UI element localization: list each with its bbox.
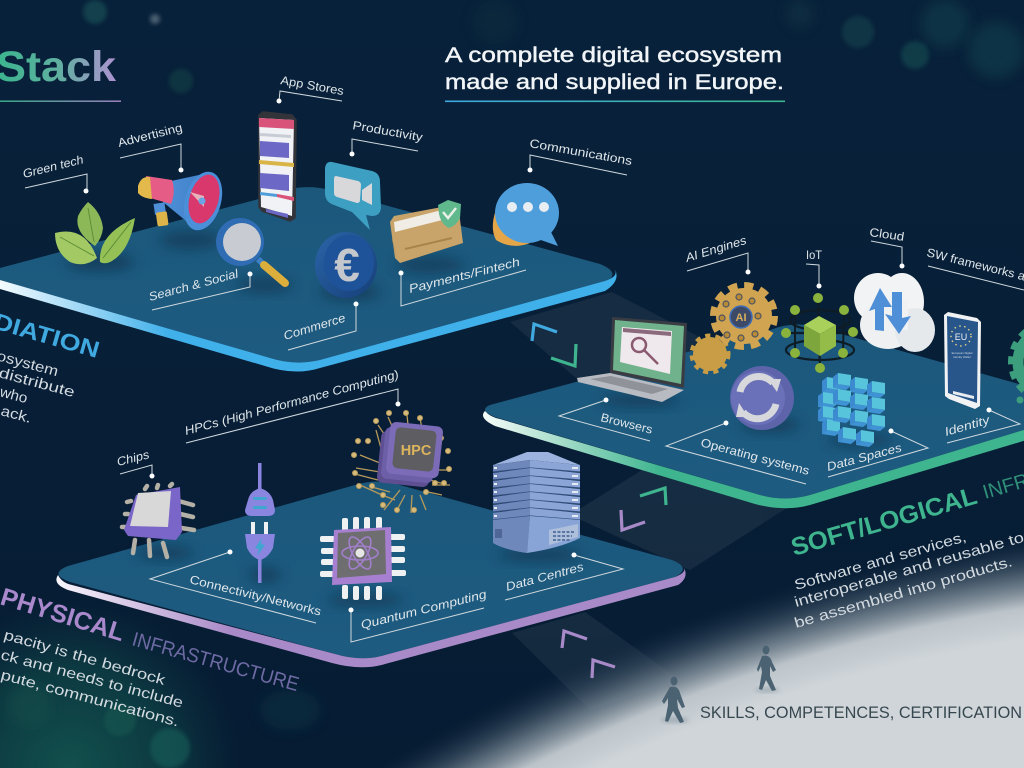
icon: advertising megaphone [138,167,229,235]
text block: soft/logical description [793,529,1024,632]
callout: chips [115,447,154,478]
callout: data spaces [825,428,928,477]
icon: commerce euro coin: € [334,239,360,291]
callout: communications [528,136,633,175]
connector bands between layers [510,292,790,710]
panel: mediation platform [0,187,617,372]
icon: productivity video bubble [325,162,381,230]
icon: SW frameworks gear [1011,323,1024,404]
headline [445,44,785,102]
icon: HPC stacked chip: HPC [401,443,432,459]
callout: communications: Communications [528,136,633,168]
text block: mediation description [0,348,76,427]
panel: soft/logical platform [483,324,1024,508]
callout: identity [943,408,1020,443]
icon: operating system sync [730,366,794,430]
callout: advertising: Advertising [116,120,184,150]
icon: browsers laptop [577,317,687,402]
icon: chips processor [122,484,194,557]
icon: identity EU wallet phone [944,312,981,409]
callout: cloud [869,225,905,268]
callout: data spaces: Data Spaces [825,440,903,474]
heading: soft/logical infrastructure [788,466,1024,562]
callout: operating systems [666,420,811,484]
callout: search and social: Search & Social [147,266,240,304]
icon: AI engines gears: AI [736,312,746,324]
callout: cloud: Cloud [869,225,905,244]
headline: made and supplied in Europe. [445,71,784,94]
callout: advertising [116,120,184,172]
text block: soft/logical description: interoperable and reusable to [793,530,1024,611]
callout: commerce: Commerce [282,311,347,343]
callout: commerce [282,302,358,350]
callout: quantum computing: Quantum Computing [359,587,488,632]
callout: green tech: Green tech [21,152,85,181]
text block: soft/logical description: Software and services, [793,529,968,594]
callout: connectivity: Connectivity/Networks [188,572,323,619]
callout: IoT [806,248,823,288]
icon: walking person back [755,646,779,692]
icon: HPC stacked chip [352,410,452,513]
callout: search and social [147,266,252,310]
callout: data centres: Data Centres [504,560,585,594]
callout: HPCs: HPCs (High Performance Computing) [183,367,400,438]
heading: soft/logical infrastructure: SOFT/LOGICAL [788,482,980,562]
heading: physical infrastructure: INFRASTRUCTURE [130,629,301,696]
icon: identity EU wallet phone: EU [955,332,967,342]
panel: physical platform [56,482,686,667]
icon: app stores phone [259,112,296,221]
text block: physical description: pacity is the bedrock [2,627,168,689]
headline: A complete digital ecosystem [445,44,782,67]
icon: green tech leaves [55,202,135,264]
callout: chips: Chips [115,447,151,469]
icon: data spaces cubes [818,373,885,447]
icon: identity EU wallet phone: Identity Wallet [953,355,971,359]
callout: productivity [350,118,424,156]
icon: communications chat bubbles [493,183,559,246]
callout: quantum computing [348,587,488,642]
callout: browsers: Browsers [599,410,654,437]
text block: soft/logical description: be assembled into products. [793,554,1014,632]
heading: physical infrastructure [0,583,301,696]
icon: identity EU wallet phone: European Digital [952,351,973,355]
callout: green tech [21,152,88,194]
text block: physical description: pute, communications. [0,667,181,730]
callout: connectivity [150,550,323,623]
icon: IoT cube [781,293,858,373]
callout: identity: Identity [943,412,992,439]
text block: physical description [0,627,185,730]
icon: walking person front [661,676,689,723]
callout: AI engines: AI Engines [683,233,748,265]
icon: search magnifier [216,218,285,283]
callout: app stores: App Stores [279,73,345,98]
heading: physical infrastructure: PHYSICAL [0,583,128,647]
icon: commerce euro coin [315,232,377,298]
callout: productivity: Productivity [351,118,424,144]
callout: operating systems: Operating systems [699,435,811,478]
icon: AI engines gears [692,286,774,372]
callout: AI engines [683,233,750,274]
icon: data centres server [493,452,580,553]
ground: skills layer [300,500,1024,768]
icon: quantum computing chip [320,517,406,600]
callout: IoT: IoT [806,248,823,262]
callout: payments fintech: Payments/Fintech [407,255,522,296]
icon: cloud up and down arrows [854,273,935,352]
callout: payments fintech [398,255,526,306]
callout: browsers [559,398,654,441]
text block: physical description: ck and needs to include [0,647,185,712]
arrows: chevrons between layers [532,324,666,678]
callout: data centres [504,552,623,600]
icon: payments wallet with shield [390,200,463,263]
callout: SW frameworks: SW frameworks a [925,245,1024,283]
icon: connectivity plug [245,463,275,583]
